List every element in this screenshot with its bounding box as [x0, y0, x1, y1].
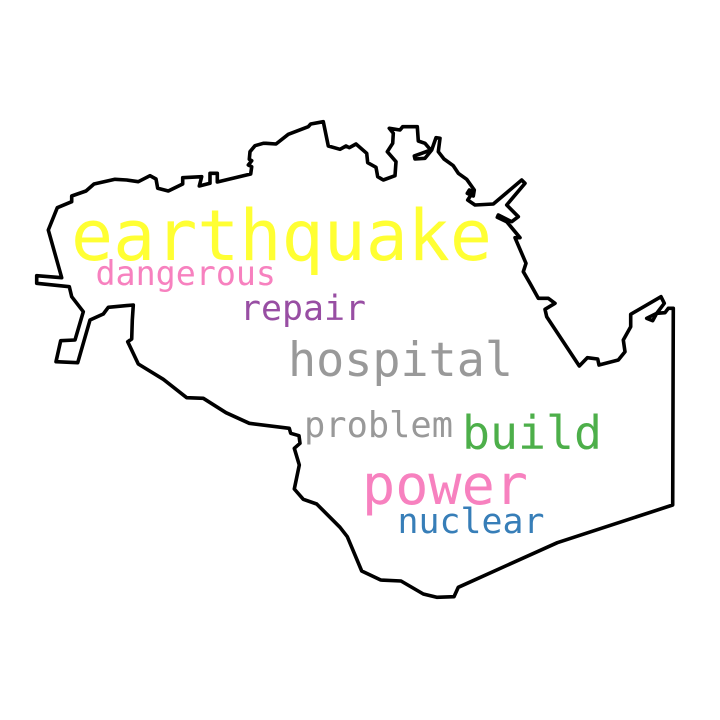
word: hospital: hospital	[288, 333, 513, 388]
word: dangerous: dangerous	[96, 254, 276, 293]
word: power: power	[362, 453, 528, 517]
word: repair: repair	[240, 289, 366, 329]
word: build: build	[462, 406, 602, 460]
map outline	[37, 122, 673, 597]
word: earthquake: earthquake	[71, 195, 492, 277]
word: nuclear: nuclear	[398, 502, 544, 542]
word: problem: problem	[304, 405, 453, 446]
